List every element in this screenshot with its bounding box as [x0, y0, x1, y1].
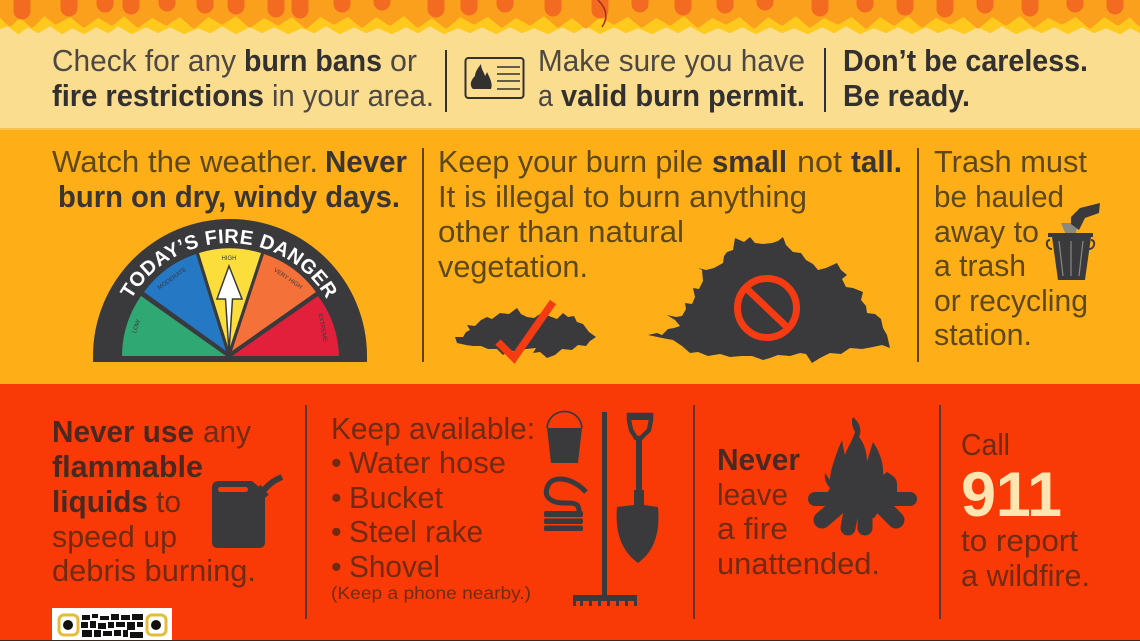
text: keep available	[331, 412, 535, 603]
text: burn bans: in your area.	[272, 79, 434, 113]
chart: fire danger gauge	[93, 219, 367, 362]
text: trash: station.	[934, 318, 1032, 352]
text: burn permit	[538, 44, 805, 113]
gauge arrow	[217, 266, 242, 352]
text: burn pile rules: Keep your burn pile	[438, 145, 703, 179]
icon: shovel	[617, 413, 658, 563]
text: trash: a trash	[934, 249, 1026, 283]
text: trash: away to	[934, 215, 1039, 249]
gauge labels: MODERATE	[157, 267, 188, 291]
wedge: high	[199, 248, 261, 350]
panel: red tips band	[0, 384, 1140, 641]
text: burn bans: Check for any	[52, 44, 237, 78]
text: be ready: Be ready.	[843, 79, 970, 113]
text: burn bans: fire restrictions	[52, 79, 264, 113]
text: burn pile rules: It is illegal to burn anything	[438, 180, 807, 214]
gauge labels	[132, 256, 327, 343]
text: burn bans: burn bans	[244, 44, 382, 78]
text: burn bans	[52, 44, 434, 113]
text: keep available: Steel rake	[349, 515, 483, 549]
text: call 911: to report	[961, 524, 1079, 558]
icon: bucket	[547, 412, 582, 463]
text: call 911: a wildfire.	[961, 559, 1090, 593]
icon: small pile with check	[455, 302, 596, 358]
text: never leave: Never	[717, 443, 800, 477]
text: keep available: Keep available:	[331, 412, 535, 446]
text: flammable liquids: flammable	[52, 450, 203, 484]
text: flammable liquids: liquids	[52, 485, 148, 519]
text: call 911: Call	[961, 428, 1010, 462]
icon: campfire	[808, 417, 917, 528]
text: trash: be hauled	[934, 180, 1064, 214]
gauge labels: LOW	[132, 319, 142, 334]
text: burn permit: Make sure you have	[538, 44, 805, 78]
icon: big pile with prohibition sign	[648, 237, 890, 363]
text: keep available: •	[331, 515, 342, 549]
text: burn permit: a	[538, 79, 553, 113]
gauge labels: HIGH	[222, 256, 236, 262]
text: weather	[52, 145, 407, 214]
text: trash	[934, 145, 1088, 352]
text: burn bans: or	[390, 44, 417, 78]
text: never leave: a fire	[717, 512, 788, 546]
text: never leave	[717, 443, 880, 581]
wedge: low	[122, 296, 226, 356]
gauge title: TODAY’S FIRE DANGER	[120, 229, 336, 299]
panel: orange tips band	[0, 128, 1140, 384]
text: keep available: •	[331, 481, 342, 515]
text: keep available: Water hose	[349, 446, 506, 480]
text: be ready: Don’t be careless.	[843, 44, 1088, 78]
text: flammable liquids	[52, 415, 256, 588]
flame border	[0, 0, 1140, 36]
wedge: very high	[232, 254, 316, 351]
text: never leave: leave	[717, 478, 788, 512]
icon: burn permit	[466, 58, 524, 98]
text: burn pile rules: tall.	[851, 145, 902, 179]
text: flammable liquids: debris burning.	[52, 554, 256, 588]
text: burn pile rules: vegetation.	[438, 250, 588, 284]
wedge: extreme	[232, 296, 339, 356]
text: keep available: •	[331, 550, 342, 584]
text: weather: Never	[325, 145, 407, 179]
text: keep available: (Keep a phone nearby.)	[331, 583, 531, 603]
text: flammable liquids: Never use	[52, 415, 194, 449]
qr code	[0, 608, 1140, 641]
text: trash: Trash must	[934, 145, 1088, 179]
text: keep available: Bucket	[349, 481, 444, 515]
text: trash: or recycling	[934, 284, 1088, 318]
text: weather: burn on dry, windy days.	[58, 180, 400, 214]
gauge labels: EXTREME	[317, 313, 327, 343]
text: burn pile rules	[438, 145, 902, 284]
text: burn pile rules: small	[712, 145, 787, 179]
text: flammable liquids: to	[156, 485, 181, 519]
text: burn pile rules: not	[797, 145, 843, 179]
text: weather: Watch the weather.	[52, 145, 318, 179]
text: keep available: Shovel	[349, 550, 440, 584]
text: call 911	[961, 428, 1090, 593]
icon: rake	[573, 412, 637, 606]
icon: hose	[544, 479, 586, 531]
panel: cream tips band	[0, 35, 1140, 130]
text: flammable liquids: any	[203, 415, 252, 449]
text: never leave: unattended.	[717, 547, 880, 581]
gauge labels: VERY HIGH	[272, 268, 303, 291]
text: be ready	[843, 44, 1088, 113]
wedge: moderate	[144, 254, 226, 351]
icon: trash can	[1047, 203, 1100, 280]
text: flammable liquids: speed up	[52, 520, 177, 554]
text: keep available: •	[331, 446, 342, 480]
icon: gas can	[212, 477, 282, 548]
text: burn permit: valid burn permit.	[561, 79, 805, 113]
text: burn pile rules: other than natural	[438, 215, 684, 249]
text: call 911: 911	[961, 460, 1062, 530]
